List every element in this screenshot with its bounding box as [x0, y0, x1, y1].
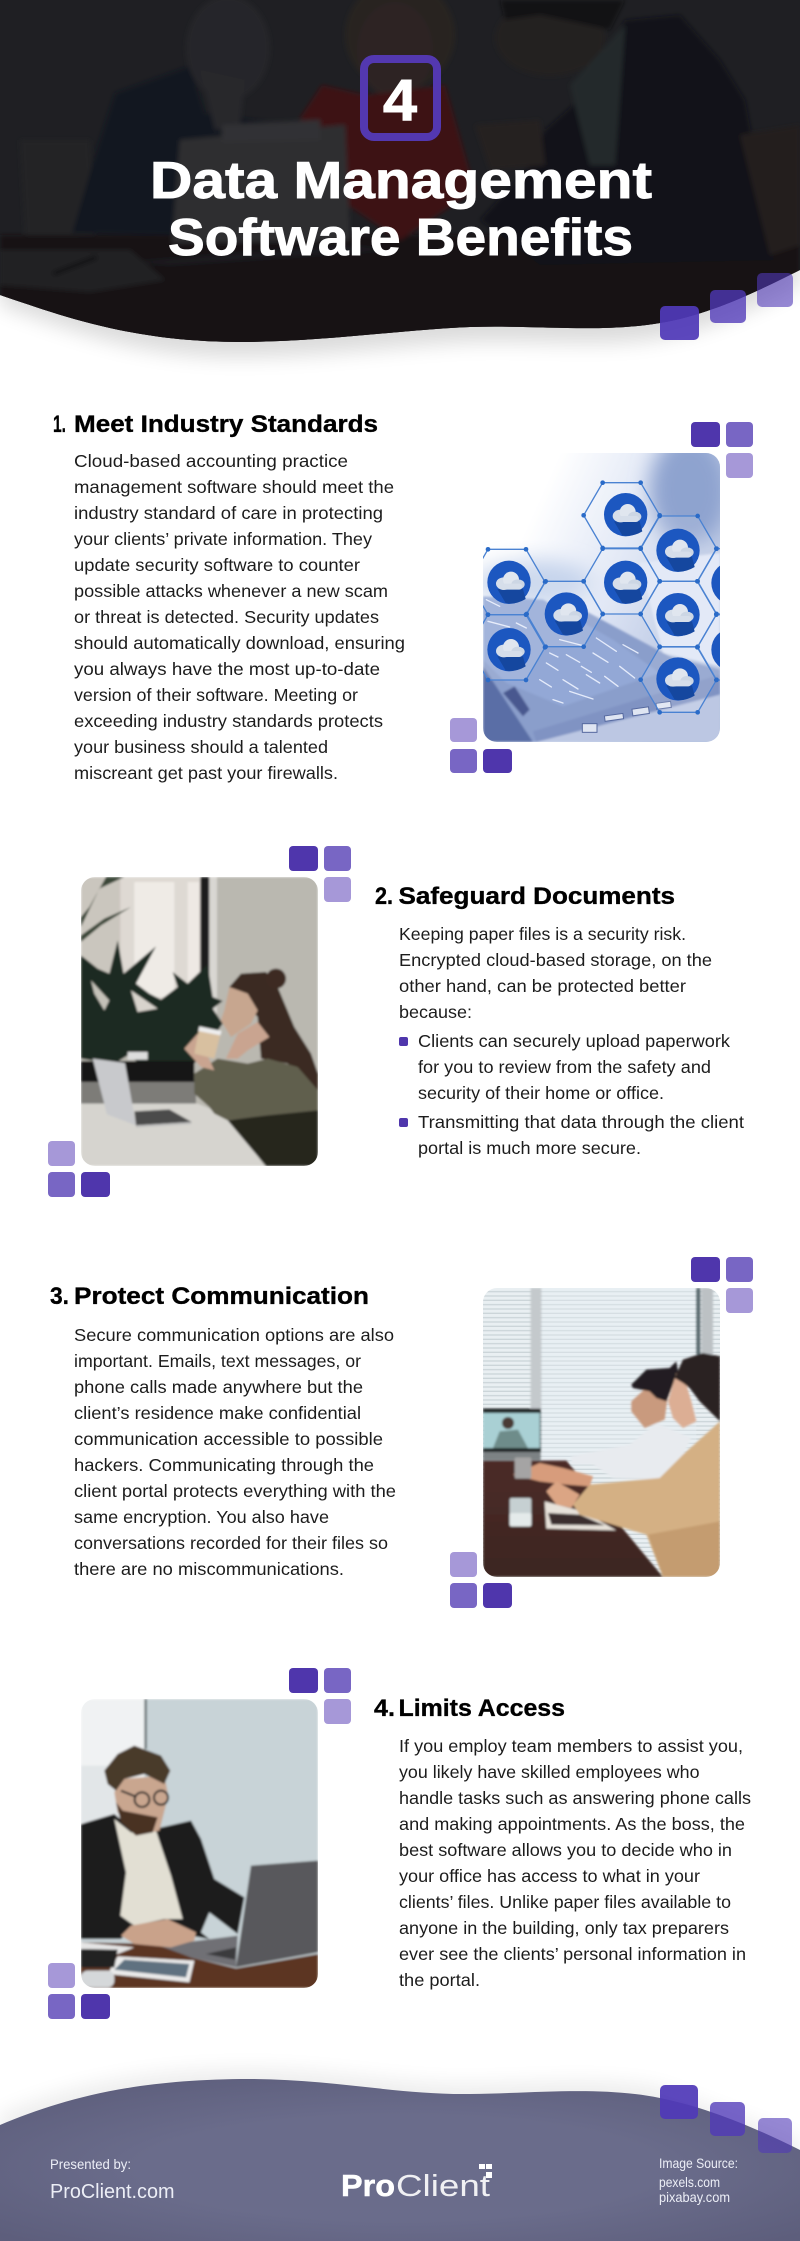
bullet list: security of their home or office.: [418, 1083, 664, 1103]
logo: Pro: [341, 2168, 395, 2203]
section 3 body text: conversations recorded for their files so: [74, 1533, 388, 1553]
logo: [341, 2164, 492, 2203]
section 4 squares: [48, 1668, 351, 2019]
section 4 heading: 4.: [374, 1695, 395, 1722]
section 4 body text: If you employ team members to assist you,: [399, 1736, 743, 1756]
section 1 body text: industry standard of care in protecting: [74, 503, 383, 523]
section 4 body text: and making appointments. As the boss, the: [399, 1814, 745, 1834]
footer wave: [0, 2079, 800, 2241]
title: [150, 152, 652, 267]
section 1 body text: management software should meet the: [74, 477, 394, 497]
presented by: [50, 2156, 174, 2203]
footer shadow: [0, 2069, 800, 2241]
photo: woman with cup at laptop: [81, 877, 318, 1166]
section 4 body text: [399, 1736, 751, 1990]
section 3 heading: 3.: [50, 1283, 69, 1310]
section 4 body text: you likely have skilled employees who: [399, 1762, 700, 1782]
bullet list: for you to review from the safety and: [418, 1057, 711, 1077]
bullet list: portal is much more secure.: [418, 1138, 641, 1158]
image source: [659, 2155, 738, 2205]
section 2 squares: [48, 846, 351, 1197]
section 2 body text: other hand, can be protected better: [399, 976, 686, 996]
photo: video conference meeting: [483, 1288, 720, 1577]
number badge: [364, 59, 437, 137]
section 3 body text: communication accessible to possible: [74, 1429, 383, 1449]
section 1 body text: you always have the most up-to-date: [74, 659, 380, 679]
section 2 heading: 2.: [375, 883, 393, 910]
section 4 heading: Limits Access: [398, 1695, 565, 1722]
section 2 body text: [399, 924, 712, 1022]
section 1 body text: should automatically download, ensuring: [74, 633, 405, 653]
section 1 body text: exceeding industry standards protects: [74, 711, 383, 731]
section 2 heading: Safeguard Documents: [398, 883, 675, 910]
section 1 body text: version of their software. Meeting or: [74, 685, 358, 705]
section 3 squares: [450, 1257, 753, 1608]
number badge: 4: [383, 68, 417, 133]
section 1 heading: Meet Industry Standards: [74, 411, 378, 438]
header photo background: [0, 0, 800, 345]
bullet list: [399, 1031, 744, 1158]
section 4 body text: best software allows you to decide who in: [399, 1840, 732, 1860]
section 3 body text: client portal protects everything with the: [74, 1481, 396, 1501]
section 2 body text: because:: [399, 1002, 472, 1022]
section 3 body text: client’s residence make confidential: [74, 1403, 361, 1423]
section 3 body text: hackers. Communicating through the: [74, 1455, 374, 1475]
section 4 body text: the portal.: [399, 1970, 480, 1990]
title: Software Benefits: [168, 209, 633, 267]
section 2 body text: Keeping paper files is a security risk.: [399, 924, 686, 944]
section 3 body text: [74, 1325, 396, 1579]
section 1 body text: or threat is detected. Security updates: [74, 607, 379, 627]
section 3 heading: Protect Communication: [74, 1283, 369, 1310]
image source: pixabay.com: [659, 2189, 730, 2205]
presented by: Presented by:: [50, 2156, 131, 2172]
section 1 body text: miscreant get past your firewalls.: [74, 763, 338, 783]
section 4 body text: your office has access to what in your: [399, 1866, 700, 1886]
photo: laptop with cloud hexagons: [483, 453, 720, 742]
image source: Image Source:: [659, 2155, 738, 2171]
section 2 body text: Encrypted cloud-based storage, on the: [399, 950, 712, 970]
section 4 body text: ever see the clients’ personal information in: [399, 1944, 746, 1964]
section 3 body text: phone calls made anywhere but the: [74, 1377, 363, 1397]
section 3 body text: there are no miscommunications.: [74, 1559, 344, 1579]
section 4 body text: clients’ files. Unlike paper files available to: [399, 1892, 731, 1912]
photo: bearded man at laptop: [81, 1699, 318, 1988]
title: Data Management: [150, 152, 652, 210]
section 3 body text: important. Emails, text messages, or: [74, 1351, 361, 1371]
section 1 heading: 1.: [53, 411, 66, 438]
footer squares: [660, 2085, 792, 2153]
section 4 body text: handle tasks such as answering phone calls: [399, 1788, 751, 1808]
header squares: [660, 273, 793, 340]
bullet list: Clients can securely upload paperwork: [418, 1031, 730, 1051]
header shadow: [0, 0, 800, 357]
section 1 body text: possible attacks whenever a new scam: [74, 581, 388, 601]
section 3 body text: Secure communication options are also: [74, 1325, 394, 1345]
section 4 body text: anyone in the building, only tax preparers: [399, 1918, 729, 1938]
section 1 body text: [74, 451, 405, 783]
section 1 body text: your business should a talented: [74, 737, 328, 757]
image source: pexels.com: [659, 2174, 720, 2190]
section 1 squares: [450, 422, 753, 773]
presented by: ProClient.com: [50, 2181, 174, 2203]
section 1 body text: Cloud-based accounting practice: [74, 451, 348, 471]
bullet list: Transmitting that data through the client: [418, 1112, 744, 1132]
logo: Client: [396, 2168, 490, 2203]
section 1 body text: your clients’ private information. They: [74, 529, 372, 549]
section 1 body text: update security software to counter: [74, 555, 360, 575]
section 3 body text: same encryption. You also have: [74, 1507, 329, 1527]
